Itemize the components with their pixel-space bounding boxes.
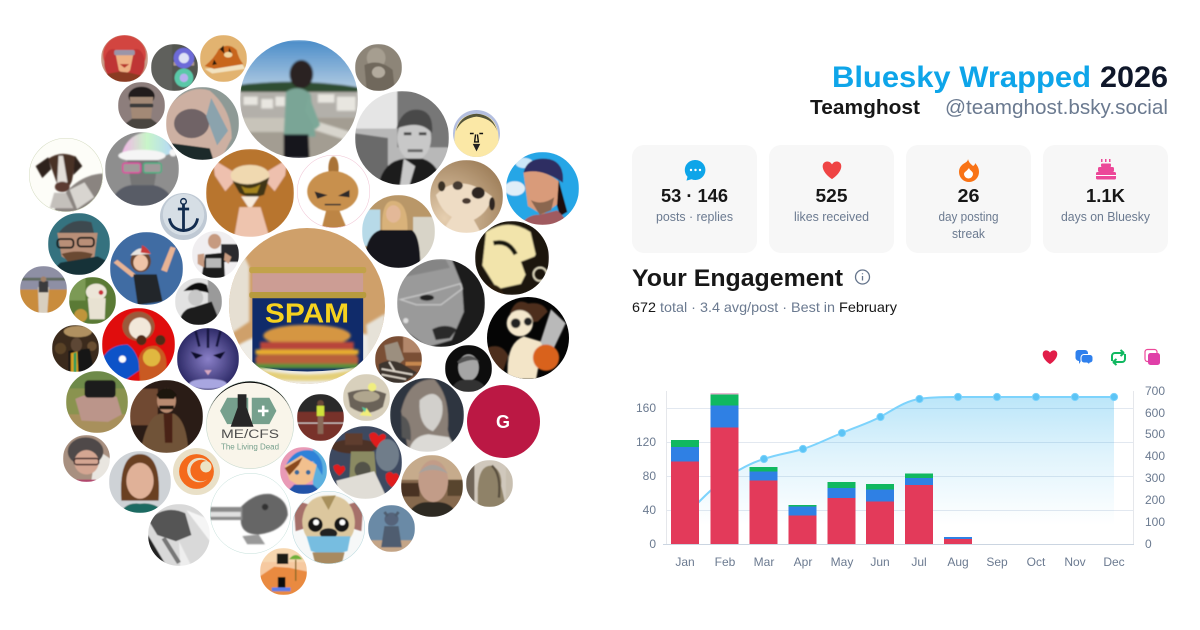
avatar: SPAM can <box>229 228 385 384</box>
avatar: anchor badge <box>160 193 207 240</box>
title: Bluesky Wrapped <box>832 61 1091 94</box>
handle: @teamghost.bsky.social <box>945 97 1168 119</box>
avatar: ME/CFS logo: The Living Dead <box>221 443 279 452</box>
heading: Your Engagement: Your Engagement <box>632 265 843 292</box>
avatar: older man on webcam <box>401 455 463 517</box>
avatar: man with moustache in brown <box>130 380 203 453</box>
avatar: tattooed arm <box>166 87 239 160</box>
right axis labels: 400 <box>1145 449 1165 463</box>
avatar: tabby cat at table <box>375 336 422 383</box>
combined bar and line chart <box>636 384 1165 569</box>
avatar: meerkat <box>430 160 503 233</box>
avatar: spotted dog <box>29 138 103 212</box>
stat card: posts and replies <box>632 145 757 253</box>
avatar: crunchyroll logo <box>173 448 220 495</box>
icon: heart <box>823 162 841 179</box>
avatar: man in black and white <box>355 91 449 185</box>
icon: legend quotes <box>1145 350 1160 365</box>
avatar: rock in grass <box>66 371 128 433</box>
avatar: man in band shirt <box>192 231 239 278</box>
month labels: Apr <box>794 555 812 569</box>
avatar: gas mask with hearts <box>329 426 402 499</box>
icon: cake <box>1096 159 1116 180</box>
stat card: posts and replies: posts · replies <box>656 209 733 224</box>
icon: speech bubble <box>685 160 705 181</box>
avatar: cartoon girl with cap <box>110 232 183 305</box>
stat card: posting streak: streak <box>952 226 985 241</box>
avatar: puppets on red <box>102 308 175 381</box>
month labels: Sep <box>986 555 1008 569</box>
avatar: runner on red track <box>297 394 344 441</box>
left axis labels: 40 <box>643 503 656 517</box>
avatar: man with glasses <box>118 82 165 129</box>
avatar: SPAM can: SPAM <box>265 297 349 328</box>
avatar: blonde woman <box>362 195 435 268</box>
stat card: posting streak: day posting <box>938 209 998 224</box>
right axis labels: 300 <box>1145 471 1165 485</box>
left axis labels: 80 <box>643 469 656 483</box>
avatar: yellow cartoon head <box>453 110 500 157</box>
icon: info <box>856 270 870 284</box>
avatar: high-contrast yellow face <box>475 221 549 295</box>
left axis labels: 120 <box>636 435 656 449</box>
right axis labels <box>1145 384 1165 551</box>
avatar: blonde in black and white <box>390 378 464 452</box>
line points <box>760 393 1118 463</box>
avatar: pony with chainsaw <box>487 297 569 379</box>
stat card: days on Bluesky: days on Bluesky <box>1061 209 1150 224</box>
avatar: ME/CFS logo <box>206 381 294 469</box>
month labels: Dec <box>1103 555 1125 569</box>
right axis labels: 500 <box>1145 427 1165 441</box>
month labels <box>675 555 1125 569</box>
avatar: black and white hair <box>148 504 210 566</box>
month labels: Aug <box>947 555 969 569</box>
stat card: likes received <box>769 145 894 253</box>
engagement summary <box>632 299 897 315</box>
month labels: Jun <box>870 555 890 569</box>
icon: legend replies <box>1075 350 1093 364</box>
stat card: likes received: likes received <box>794 209 869 224</box>
avatar: woman with auburn hair <box>109 451 171 513</box>
right axis labels: 600 <box>1145 406 1165 420</box>
avatar: snow globe <box>343 374 390 421</box>
month labels: Jul <box>911 555 927 569</box>
engagement summary: 672 <box>632 299 656 315</box>
stat card: likes received: 525 <box>816 186 848 206</box>
icon: legend reposts <box>1112 350 1125 365</box>
avatar: person in wheat field <box>20 266 67 313</box>
line: cumulative engagement <box>685 397 1114 517</box>
avatar: older man dark portrait <box>445 345 492 392</box>
avatar: grey dragon figurine <box>368 505 415 552</box>
stat card: posts and replies: 53 · 146 <box>661 186 728 206</box>
avatar: rabbit-duck engraving <box>210 473 291 554</box>
avatar: santa hat selfie <box>105 132 179 206</box>
title: 2026 <box>1100 61 1168 94</box>
avatar: woman with glasses grey hair <box>63 435 110 482</box>
month labels: May <box>831 555 853 569</box>
avatar: runner on balcony <box>240 40 358 158</box>
avatar: letter G: G <box>496 412 510 432</box>
engagement summary: February <box>839 299 897 315</box>
avatar: purple cat face <box>177 328 239 390</box>
avatar: fennec with sunglasses <box>206 149 294 237</box>
avatar: clay figure <box>466 460 513 507</box>
right axis labels: 100 <box>1145 515 1165 529</box>
avatar: white creature statue <box>69 277 116 324</box>
month labels: Feb <box>715 555 736 569</box>
left axis labels: 0 <box>649 537 656 551</box>
avatar bubble cluster <box>20 35 579 595</box>
avatar: man with backwards cap <box>506 152 579 225</box>
left axis labels <box>636 401 656 551</box>
display name: Teamghost <box>810 97 920 119</box>
month labels: Mar <box>754 555 774 569</box>
avatar: hyena with face mask <box>292 491 365 564</box>
right axis labels: 200 <box>1145 493 1165 507</box>
avatar: cowboy in black and white <box>175 278 222 325</box>
month labels: Nov <box>1064 555 1086 569</box>
stat card: days on Bluesky: 1.1K <box>1086 186 1125 206</box>
avatar: cartoon character with palm tree <box>260 548 307 595</box>
avatar: engraved portrait <box>355 44 402 91</box>
engagement summary: total · 3.4 avg/post · Best in <box>660 299 835 315</box>
month labels: Jan <box>675 555 695 569</box>
bars: Jan to Aug <box>671 393 972 544</box>
area: cumulative engagement <box>685 397 1114 544</box>
stat card: posting streak <box>906 145 1031 253</box>
right axis labels: 0 <box>1145 537 1152 551</box>
avatar: person with rainbow scarf <box>52 325 99 372</box>
avatar: ME/CFS logo: ME/CFS <box>221 427 279 441</box>
avatar: tiger illustration <box>200 35 247 82</box>
avatar: arcade machine <box>151 44 198 91</box>
avatar: glasses man in black and white <box>397 259 485 347</box>
icon: legend heart <box>1043 350 1057 364</box>
right axis labels: 700 <box>1145 384 1165 398</box>
left axis labels: 160 <box>636 401 656 415</box>
icon: flame <box>959 159 979 182</box>
avatar: bearded man with glasses <box>48 213 110 275</box>
month labels: Oct <box>1027 555 1046 569</box>
chart legend <box>1043 350 1160 365</box>
avatar: mymble wooden figure <box>297 155 370 228</box>
avatar: letter G <box>467 385 540 458</box>
avatar: red-haired figure <box>101 35 148 82</box>
avatar: anime character with helmet <box>280 447 327 494</box>
stat card: days on Bluesky <box>1043 145 1168 253</box>
stat card: posting streak: 26 <box>958 186 980 206</box>
